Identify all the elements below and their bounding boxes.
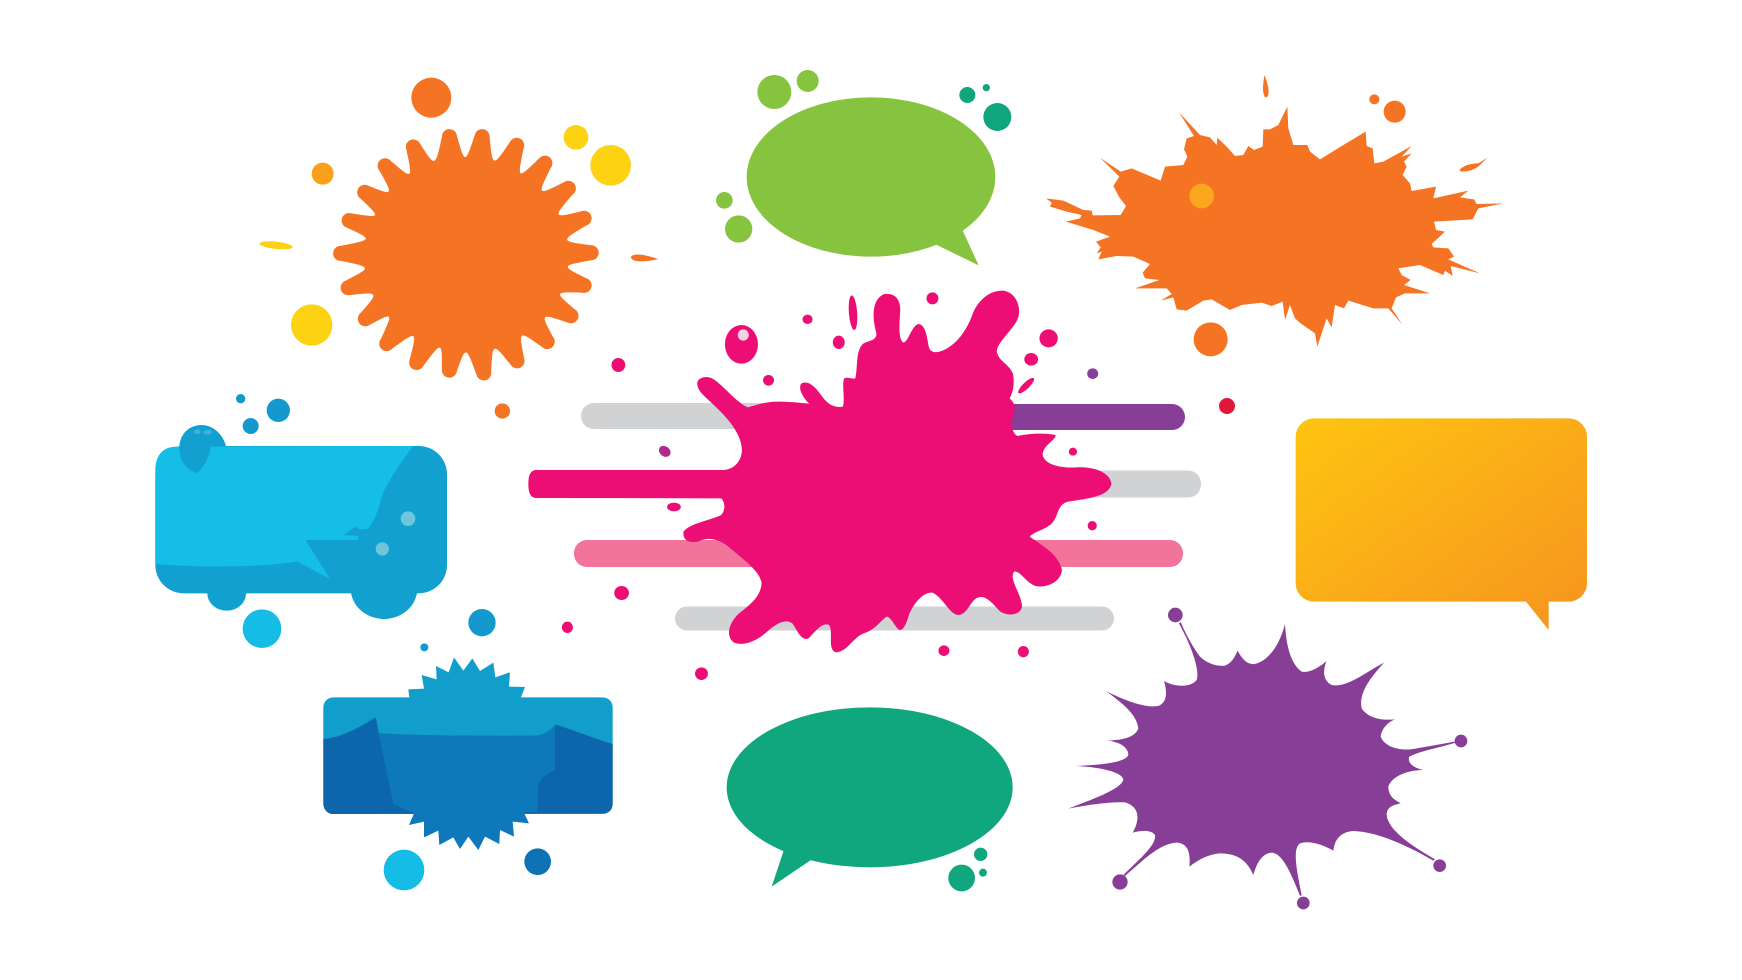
banner dots: [384, 643, 551, 890]
teal bubble dots: [948, 848, 987, 891]
blue bubble body: [155, 446, 447, 619]
sun splash droplets: [259, 78, 658, 419]
purple burst body: [1068, 622, 1456, 896]
panel: orange sun splash: [259, 78, 658, 419]
jagged splash droplets: [1189, 75, 1487, 356]
purple burst end dots: [1112, 608, 1467, 909]
starburst bottom: [409, 811, 529, 850]
jagged splash body: [1046, 107, 1503, 347]
sun splash body: [333, 129, 599, 380]
pink splash droplets: [562, 292, 1098, 680]
panel: jagged orange splash: [1046, 75, 1503, 356]
panel: blue starburst banner: [323, 643, 613, 890]
pink splash body: [528, 291, 1112, 652]
panel: teal speech bubble: [727, 707, 1013, 891]
red dot: [1219, 398, 1235, 414]
horizontal bars: [574, 403, 1201, 630]
starburst top: [408, 657, 525, 698]
panel: central pink splash with bars: [528, 291, 1235, 680]
blue bubble drop: [179, 425, 226, 473]
panel: green speech bubble: [716, 70, 1011, 265]
panel: purple burst: [1068, 608, 1467, 909]
blue bubble dots: [236, 394, 496, 648]
banner body: [323, 697, 613, 814]
panel: blue rounded speech bubble: [155, 394, 496, 648]
teal bubble body: [727, 707, 1013, 887]
green bubble dots: [716, 70, 1011, 243]
green bubble body: [747, 97, 995, 265]
panel: amber rectangular speech bubble: [1296, 418, 1587, 630]
